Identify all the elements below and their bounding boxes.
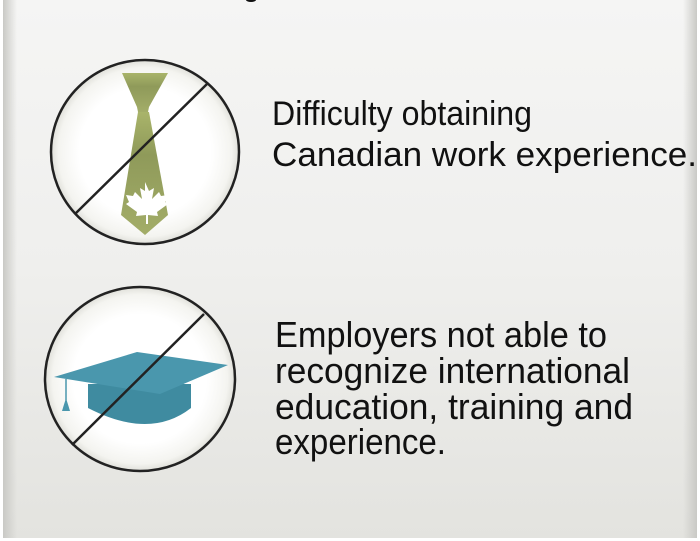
text: credentials: education, training and bbox=[275, 386, 633, 427]
tie body bbox=[121, 112, 168, 235]
icon: no tie bbox=[51, 60, 239, 244]
tassel bbox=[65, 379, 67, 400]
tie knot bbox=[122, 73, 168, 112]
text: work experience bbox=[272, 95, 697, 174]
maple leaf bbox=[126, 182, 168, 224]
text: credentials: Employers not able to bbox=[275, 314, 607, 355]
cap base bbox=[88, 384, 191, 424]
cap board bbox=[54, 352, 228, 394]
text: credentials bbox=[275, 314, 633, 462]
text: work experience: Difficulty obtaining bbox=[272, 95, 532, 133]
text: credentials: experience. bbox=[275, 421, 446, 462]
icon: no graduation cap bbox=[45, 287, 235, 471]
text: credentials: recognize international bbox=[275, 350, 630, 391]
text: work experience: Canadian work experience. bbox=[272, 136, 697, 174]
